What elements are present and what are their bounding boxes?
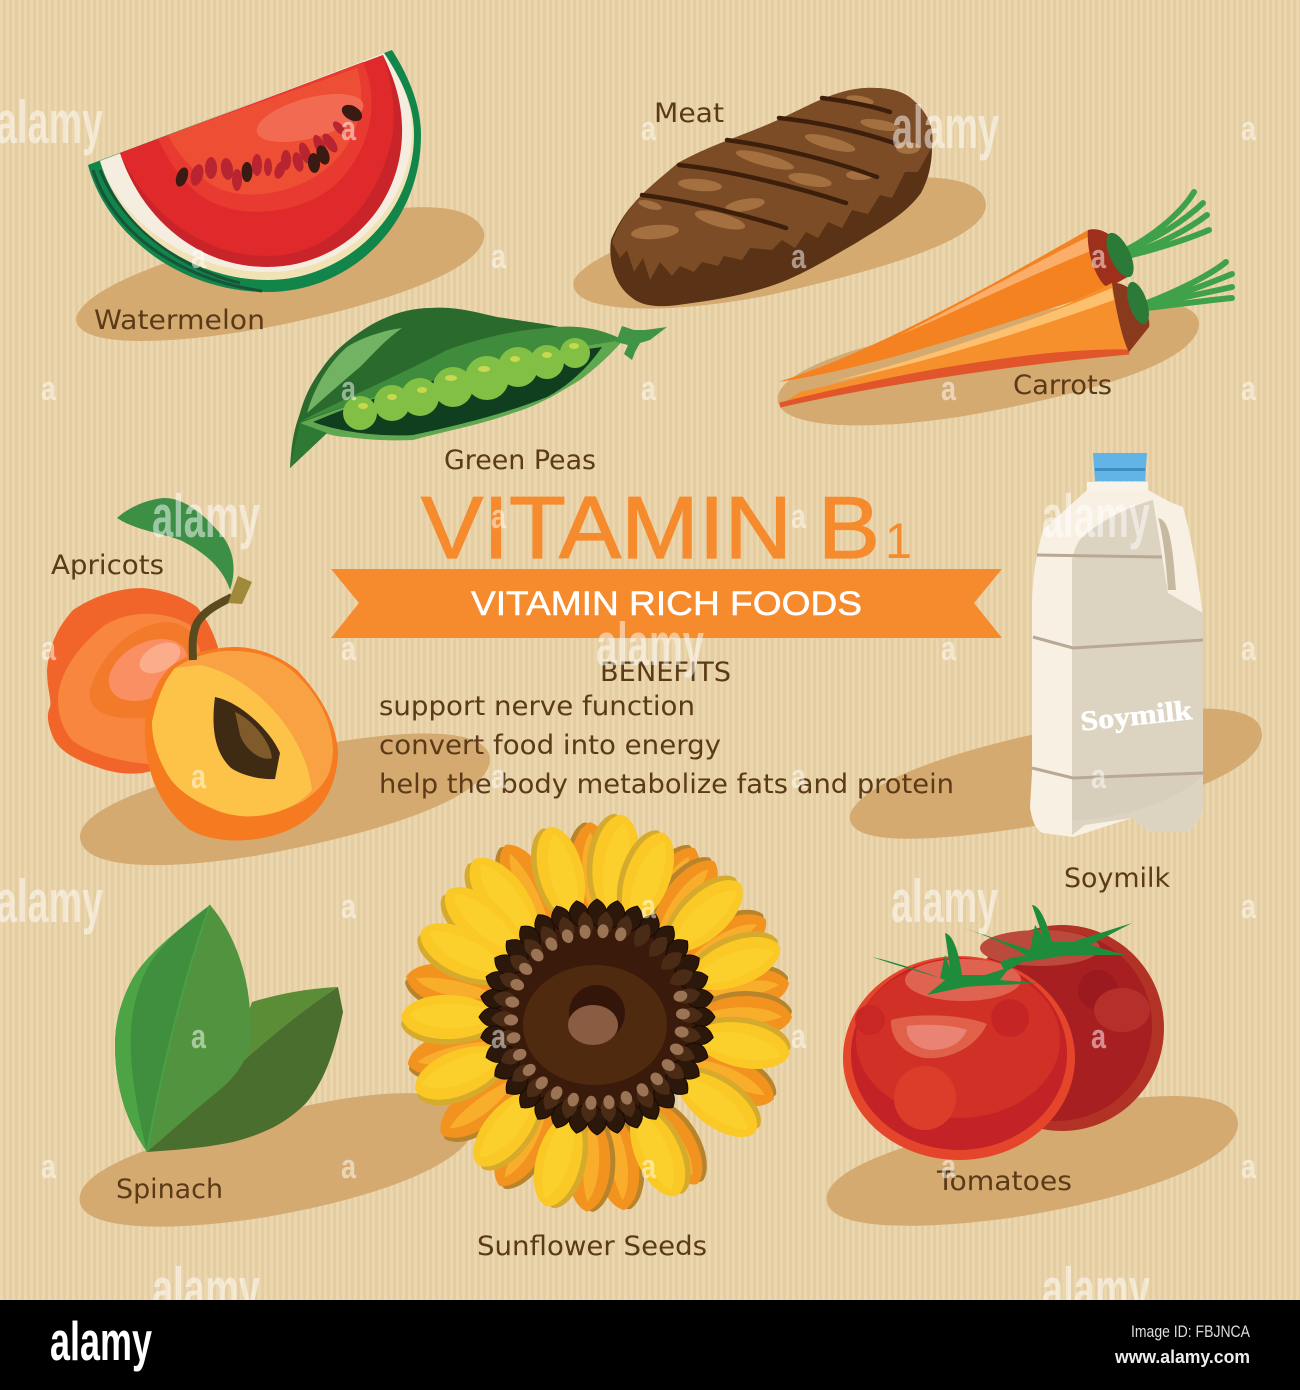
watermarks: a bbox=[191, 1018, 207, 1056]
label: Soymilk: Soymilk bbox=[1064, 863, 1170, 894]
watermarks: a bbox=[41, 630, 57, 668]
watermarks: alamy bbox=[1042, 483, 1150, 550]
label: Sunflower Seeds: Sunflower Seeds bbox=[477, 1231, 707, 1262]
watermarks: a bbox=[1241, 630, 1257, 668]
watermarks: a bbox=[491, 498, 507, 536]
watermarks: a bbox=[1241, 888, 1257, 926]
ribbon banner bbox=[331, 569, 1002, 638]
watermarks: a bbox=[41, 370, 57, 408]
label: Meat: Meat bbox=[654, 98, 724, 129]
food: apricots bbox=[47, 498, 338, 841]
label: Watermelon: Watermelon bbox=[94, 305, 265, 336]
food: carrots bbox=[778, 192, 1232, 405]
watermarks: alamy bbox=[0, 868, 103, 935]
food: tomatoes bbox=[843, 905, 1164, 1160]
watermarks: a bbox=[491, 1018, 507, 1056]
title: VITAMIN B bbox=[421, 478, 880, 577]
watermarks: a bbox=[791, 758, 807, 796]
watermarks: a bbox=[791, 1018, 807, 1056]
watermarks: a bbox=[1091, 758, 1107, 796]
label: Spinach: Spinach bbox=[116, 1174, 223, 1205]
label: Carrots: Carrots bbox=[1013, 370, 1112, 401]
footer bar: Image ID: FBJNCA bbox=[1131, 1322, 1251, 1341]
food shadows bbox=[76, 177, 1262, 1227]
ribbon banner: VITAMIN RICH FOODS bbox=[471, 585, 862, 623]
watermarks: a bbox=[341, 1148, 357, 1186]
watermarks: a bbox=[641, 370, 657, 408]
watermarks: a bbox=[1241, 370, 1257, 408]
watermarks: a bbox=[941, 370, 957, 408]
watermarks: a bbox=[641, 888, 657, 926]
footer bar: alamy bbox=[50, 1310, 152, 1372]
watermarks: a bbox=[341, 630, 357, 668]
watermarks: alamy bbox=[1042, 1256, 1150, 1323]
label: Green Peas: Green Peas bbox=[444, 445, 596, 476]
watermarks: alamy bbox=[0, 89, 103, 156]
watermarks: alamy bbox=[596, 611, 704, 678]
benefits text bbox=[379, 657, 954, 800]
benefits text: BENEFITS bbox=[600, 657, 731, 688]
title: 1 bbox=[885, 513, 912, 569]
watermarks: a bbox=[941, 1148, 957, 1186]
footer bar: www.alamy.com bbox=[1114, 1347, 1250, 1367]
watermarks: a bbox=[1241, 110, 1257, 148]
benefits text: convert food into energy bbox=[379, 730, 721, 761]
food: soymilk bottle: Soymilk bbox=[1079, 695, 1194, 738]
watermarks: a bbox=[791, 238, 807, 276]
watermarks: a bbox=[1091, 238, 1107, 276]
watermarks: a bbox=[191, 238, 207, 276]
watermarks: a bbox=[341, 888, 357, 926]
watermarks: a bbox=[941, 630, 957, 668]
benefits text: help the body metabolize fats and protein bbox=[379, 769, 954, 800]
food: green peas bbox=[290, 308, 667, 468]
watermarks: alamy bbox=[892, 94, 999, 161]
footer bar bbox=[0, 1300, 1300, 1390]
label: Tomatoes: Tomatoes bbox=[936, 1166, 1072, 1197]
watermarks: a bbox=[491, 238, 507, 276]
food: soymilk bottle bbox=[1030, 453, 1203, 837]
watermarks: a bbox=[641, 1148, 657, 1186]
watermarks: a bbox=[791, 498, 807, 536]
watermarks: a bbox=[341, 110, 357, 148]
watermarks: a bbox=[191, 758, 207, 796]
watermarks: alamy bbox=[152, 483, 260, 550]
benefits text: support nerve function bbox=[379, 691, 695, 722]
watermarks: a bbox=[641, 110, 657, 148]
food: sunflower bbox=[401, 811, 795, 1214]
watermarks: a bbox=[341, 370, 357, 408]
watermarks: alamy bbox=[891, 868, 998, 935]
label: Apricots: Apricots bbox=[51, 550, 164, 581]
food: spinach leaves bbox=[115, 905, 343, 1152]
watermarks: a bbox=[41, 1148, 57, 1186]
watermarks: a bbox=[491, 758, 507, 796]
watermarks: alamy bbox=[152, 1256, 260, 1323]
food: meat bbox=[610, 88, 932, 306]
watermarks: a bbox=[1091, 1018, 1107, 1056]
food: watermelon bbox=[88, 50, 421, 292]
watermarks: a bbox=[1241, 1148, 1257, 1186]
